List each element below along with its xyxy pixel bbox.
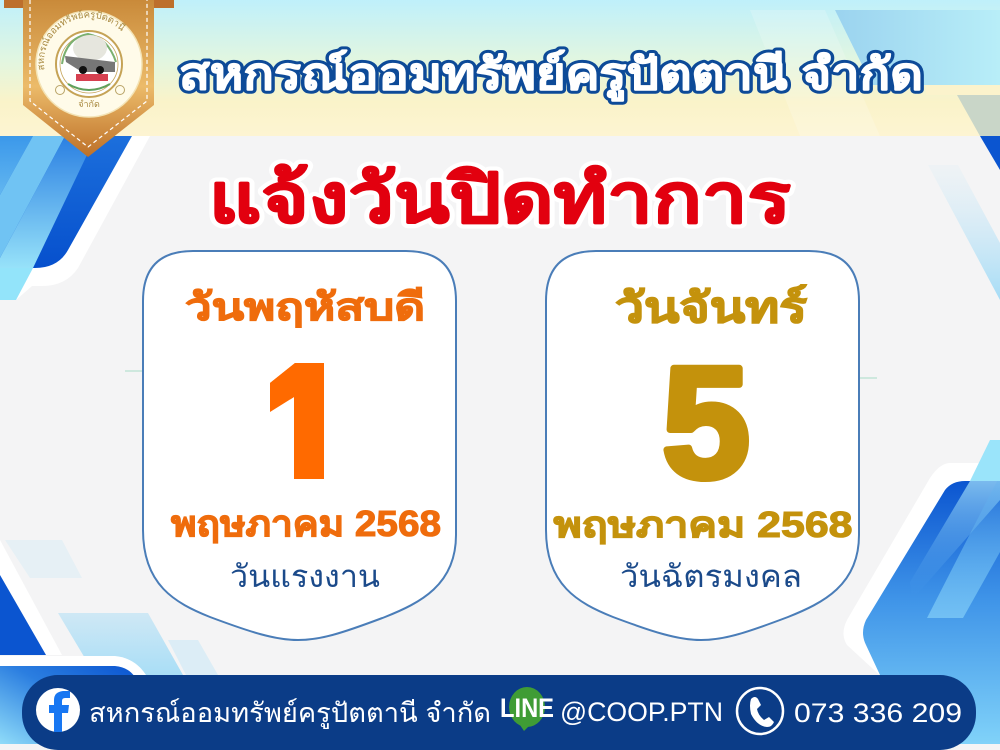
weekday: วันจันทร์ — [615, 284, 808, 331]
date number: 1 — [248, 323, 348, 522]
logo seal: สหกรณ์ออมทรัพย์ครูปัตตานี — [38, 10, 126, 70]
phone number: 073 336 209 — [794, 698, 962, 728]
pennant badge — [4, 0, 174, 157]
icon: LINE — [500, 687, 554, 731]
holiday name: วันฉัตรมงคล — [620, 559, 802, 594]
logo seal: จำกัด — [78, 99, 100, 109]
facebook page name: สหกรณ์ออมทรัพย์ครูปัตตานี จำกัด — [89, 697, 491, 729]
header band — [0, 0, 1000, 136]
blue shape: upper right — [928, 136, 1000, 300]
weekday: วันพฤหัสบดี — [185, 287, 425, 329]
month and year: พฤษภาคม 2568 — [171, 503, 441, 544]
main heading: แจ้งวันปิดทำการ — [209, 161, 792, 237]
LINE account: @COOP.PTN — [560, 697, 723, 727]
main heading: แจ้งวันปิดทำการ — [209, 161, 792, 237]
icon: LINE: LINE — [500, 693, 554, 723]
holiday name: วันแรงงาน — [230, 559, 380, 594]
logo seal — [35, 10, 143, 118]
icon: telephone — [737, 688, 783, 734]
blue shape: lower right — [844, 440, 1000, 744]
blue shape: upper left — [0, 136, 150, 300]
organisation title: สหกรณ์ออมทรัพย์ครูปัตตานี จำกัด — [179, 49, 923, 101]
icon: facebook — [36, 688, 80, 732]
card: Monday 5 May — [546, 251, 859, 640]
footer contact bar — [22, 675, 976, 750]
organisation title: สหกรณ์ออมทรัพย์ครูปัตตานี จำกัด — [179, 49, 923, 101]
blue shape: lower left — [0, 540, 218, 744]
date number: 5 — [662, 335, 750, 511]
card: Thursday 1 May — [143, 251, 456, 640]
faint green lines beside cards — [125, 371, 877, 378]
month and year: พฤษภาคม 2568 — [554, 504, 852, 545]
